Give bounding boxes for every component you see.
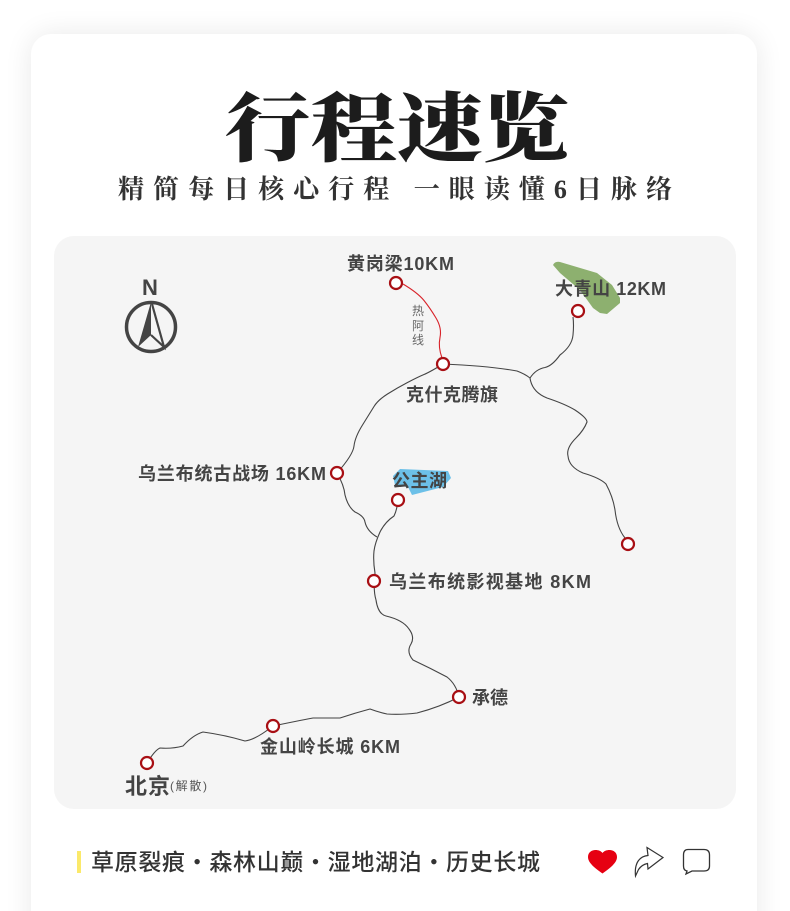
label: film base: 乌兰布统影视基地 8KM <box>389 571 591 592</box>
area: Daqing mountain <box>553 262 620 314</box>
label: Beijing: (解散) <box>170 778 207 793</box>
label: Beijing <box>125 774 207 799</box>
title: 行程速览 <box>225 89 569 172</box>
icon: heart <box>588 850 617 874</box>
area: Princess lake <box>393 469 451 495</box>
label: Jinshanling: 金山岭长城 6KM <box>260 736 400 757</box>
subtitle: 精简每日核心行程 一眼读懂6日脉络 <box>118 174 672 204</box>
label: Beijing: 北京 <box>125 774 170 799</box>
footer text: 草原裂痕・森林山巅・湿地湖泊・历史长城 <box>91 849 540 875</box>
icon: compass: N <box>142 275 158 300</box>
label: Chengde: 承德 <box>472 687 508 708</box>
routes: black roads <box>147 317 625 763</box>
accent bar <box>77 851 81 873</box>
label: Daqingshan: 大青山 12KM <box>555 279 666 299</box>
label: Huanggangliang: 黄岗梁10KM <box>347 253 454 274</box>
icon: compass <box>126 275 176 352</box>
route: red scenic road <box>403 284 442 358</box>
label: Princess lake: 公主湖 <box>392 471 447 491</box>
label: scenic road <box>412 304 424 347</box>
map nodes <box>141 277 634 769</box>
label: scenic road: 阿 <box>412 319 424 333</box>
label: scenic road: 线 <box>412 333 424 347</box>
label: scenic road: 热 <box>412 304 424 318</box>
panel: route map background <box>54 236 736 809</box>
icon: share arrow <box>635 848 663 876</box>
icon: comment bubble <box>684 850 710 874</box>
label: Keshiketeng: 克什克腾旗 <box>406 384 498 405</box>
label: Wulanbutong battlefield: 乌兰布统古战场 16KM <box>138 463 326 484</box>
